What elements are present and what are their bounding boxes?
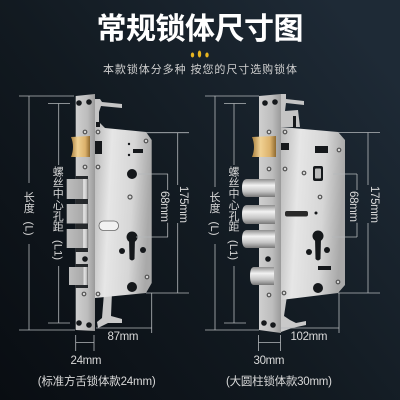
label: screw centre distance L1: (L1) [51,240,63,260]
icon: three yellow dots [191,50,209,58]
label: screw centre distance L1: 丝 [228,177,240,190]
label: 175mm: 175mm [177,186,189,223]
panel: standard square bolt lock [19,94,189,388]
label: screw centre distance L1: 心 [53,199,64,212]
label: length L: 度 [24,201,35,215]
screws [267,130,341,297]
label: screw centre distance L1: 心 [228,199,240,212]
label: screw centre distance L1: 中 [53,188,64,200]
label: length L: 长 [24,191,35,204]
label: 68mm: 68mm [158,191,170,222]
label: length L: (L) [208,222,220,236]
lock body [95,127,152,298]
bottom hook [97,292,122,328]
label: length L: (L) [22,222,34,236]
gold latch [252,136,276,157]
label: screw centre distance L1: 距 [53,221,64,234]
label: screw centre distance L1: 螺 [228,166,240,179]
label: screw centre distance L1: 距 [228,221,240,234]
dimension lines [19,96,189,351]
title: 常规锁体尺寸图 [96,13,304,46]
screws [82,130,149,296]
slot [99,221,118,230]
caption: standard: (标准方舌锁体款24mm) [38,374,156,388]
label: 102mm: 102mm [290,331,328,343]
label: screw centre distance L1: (L1) [227,240,239,260]
top hook [95,99,122,128]
label: 68mm: 68mm [347,191,359,222]
faceplate [76,94,95,331]
label: length L [208,191,220,236]
label: length L: 度 [210,201,220,215]
top hook [281,94,304,127]
label: 30mm: 30mm [254,355,284,367]
square bolts [67,179,88,285]
label: screw centre distance L1: 螺 [53,166,64,179]
holes and slots [76,99,146,328]
holes and slots [261,99,331,328]
spindle window [315,168,321,178]
label: 175mm: 175mm [368,186,380,223]
faceplate [259,94,281,333]
caption: round bolt: (大圆柱锁体款30mm) [226,374,332,388]
bolt recess shadow [76,176,88,288]
gold latch [71,136,90,157]
bottom hook [281,296,306,332]
label: screw centre distance L1: 丝 [53,177,64,190]
label: screw centre distance L1 [227,166,240,260]
label: screw centre distance L1: 孔 [53,210,64,223]
label: screw centre distance L1 [51,166,64,260]
lock body [281,127,345,300]
label: length L [22,191,35,236]
label: screw centre distance L1: 中 [228,188,240,200]
panel: large round bolt lock [205,94,380,388]
subtitle: 本款锁体分多种 按您的尺寸选购锁体 [103,62,297,76]
dimension lines [205,96,380,351]
label: 87mm: 87mm [108,331,138,343]
label: screw centre distance L1: 孔 [228,210,240,223]
round bolts [242,179,275,285]
label: length L: 长 [210,191,220,204]
slot [285,211,308,216]
label: 24mm: 24mm [70,355,102,367]
